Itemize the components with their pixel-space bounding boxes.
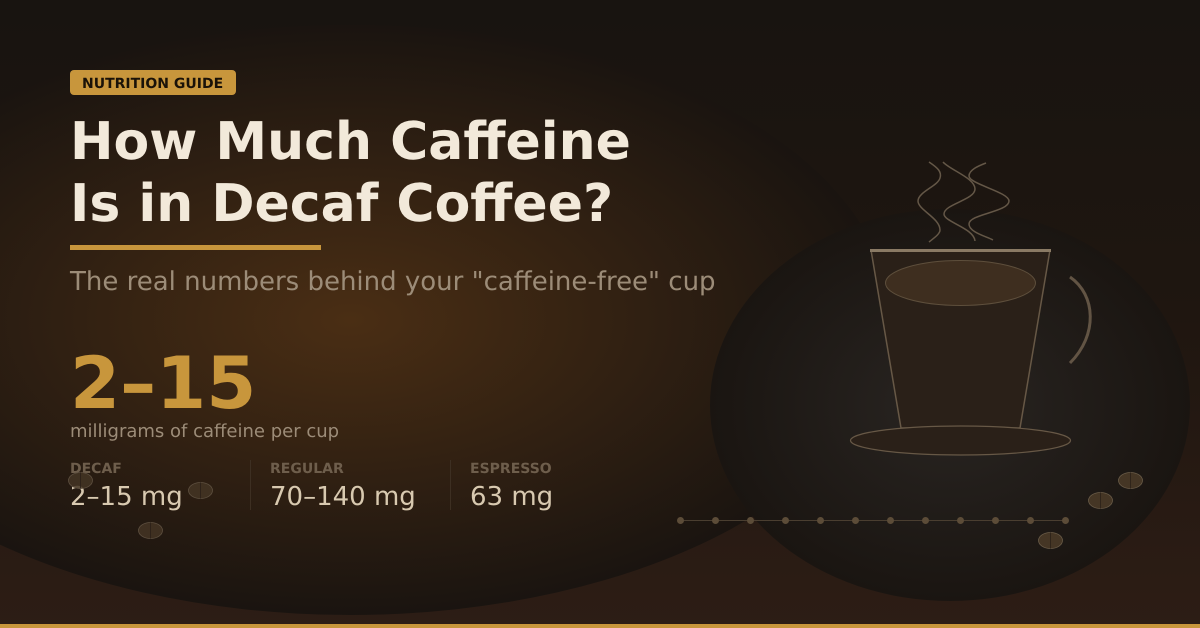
title bbox=[70, 112, 631, 234]
coffee surface bbox=[886, 260, 1036, 306]
cup body bbox=[871, 250, 1050, 428]
comparison: regular: 70–140 mg bbox=[270, 482, 416, 512]
subtitle: The real numbers behind your "caffeine-free" cup bbox=[70, 267, 716, 297]
comparison: espresso bbox=[470, 461, 553, 512]
badge text: NUTRITION GUIDE bbox=[82, 76, 223, 92]
title: Is in Decaf Coffee? bbox=[70, 174, 613, 234]
comparison: decaf bbox=[70, 461, 183, 512]
icon: coffee beans right bbox=[1038, 472, 1142, 548]
comparison: decaf: DECAF bbox=[70, 461, 122, 477]
dotted timeline bbox=[677, 517, 1069, 524]
comparison: espresso: ESPRESSO bbox=[470, 461, 552, 477]
comparison: espresso: 63 mg bbox=[470, 482, 553, 512]
icon: coffee cup bbox=[850, 162, 1090, 455]
comparison: decaf: 2–15 mg bbox=[70, 482, 183, 512]
stat caption: milligrams of caffeine per cup bbox=[70, 421, 339, 442]
badge background bbox=[70, 70, 236, 95]
title: How Much Caffeine bbox=[70, 112, 631, 172]
bottom accent bar bbox=[0, 624, 1200, 628]
title underline bbox=[70, 245, 321, 250]
cup handle bbox=[1070, 277, 1090, 363]
comparison: regular: REGULAR bbox=[270, 461, 344, 477]
saucer bbox=[850, 426, 1070, 455]
cup rim bbox=[870, 249, 1051, 252]
icon: steam bbox=[918, 162, 1009, 242]
comparison: regular bbox=[270, 461, 416, 512]
big stat: 2–15 bbox=[70, 341, 256, 425]
